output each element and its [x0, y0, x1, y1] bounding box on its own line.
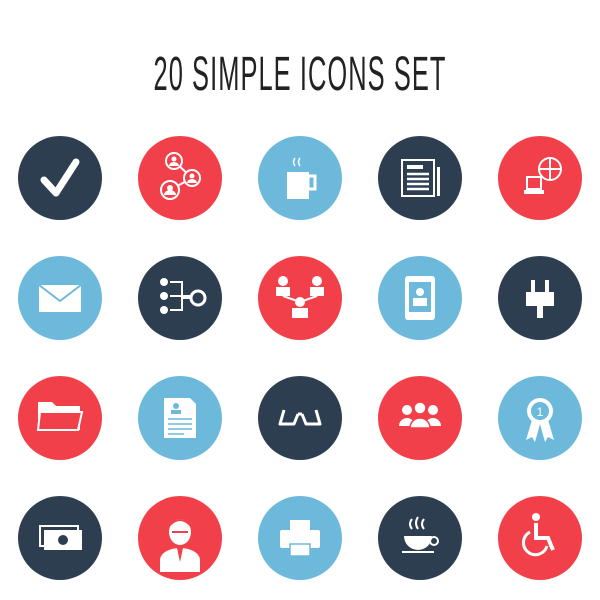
icon: resume [138, 376, 222, 460]
icon: wheelchair [498, 496, 582, 580]
icon: globe computer [498, 136, 582, 220]
icon: network people [138, 136, 222, 220]
icon: mug [258, 136, 342, 220]
icon: businessman [138, 496, 222, 580]
icon: printer [258, 496, 342, 580]
icon: folder [18, 376, 102, 460]
icon: check [18, 136, 102, 220]
icon: plug [498, 256, 582, 340]
icon: phone contact [378, 256, 462, 340]
title: 20 SIMPLE ICONS SET [153, 48, 446, 101]
icon: hierarchy [138, 256, 222, 340]
icon: team [258, 256, 342, 340]
icon: money [18, 496, 102, 580]
icon: newspaper [378, 136, 462, 220]
icon: award: 1 [537, 405, 544, 419]
icon: group [378, 376, 462, 460]
icon: hot cup [378, 496, 462, 580]
icon: envelope [18, 256, 102, 340]
icon: award [498, 376, 582, 460]
icon: glasses [258, 376, 342, 460]
